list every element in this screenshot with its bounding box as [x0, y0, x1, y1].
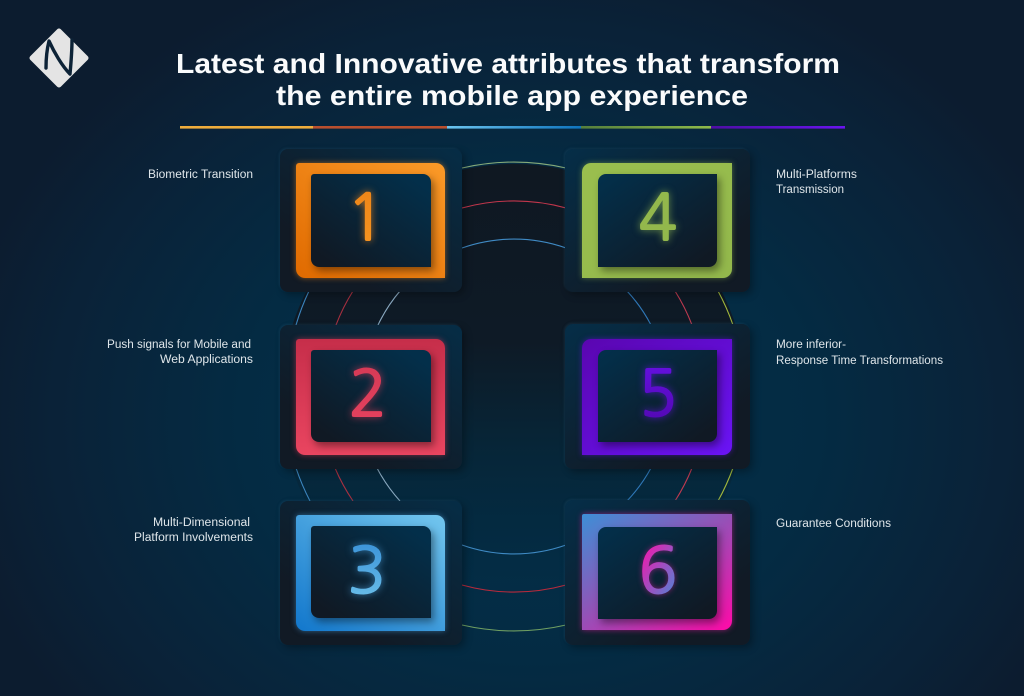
title multicolour underline: [180, 126, 845, 129]
ring background: [281, 164, 747, 630]
number 6: 6: [639, 540, 677, 603]
label: guarantee conditions: Guarantee Conditions: [776, 518, 891, 530]
label: multi-platforms: [776, 169, 857, 196]
number 1: 1: [347, 187, 385, 250]
label: push signals: Push signals for Mobile and: [107, 339, 251, 351]
number 3: 3: [348, 540, 386, 603]
card 2: [280, 325, 462, 469]
label: multi-dimensional: Platform Involvements: [134, 532, 253, 544]
title: Latest and Innovative attributes that transform: [176, 48, 840, 79]
connecting ring arcs: [296, 162, 733, 631]
label: push signals: [107, 339, 253, 366]
card 6: [565, 500, 750, 645]
number 4: 4: [639, 187, 677, 250]
number 2: 2: [349, 363, 387, 426]
label: response time: More inferior-: [776, 339, 846, 351]
label: multi-dimensional: Multi-Dimensional: [153, 517, 250, 529]
title: the entire mobile app experience: [276, 80, 748, 111]
card 1: [280, 149, 462, 292]
title: [176, 48, 840, 111]
label: multi-platforms: Transmission: [776, 184, 844, 196]
label: push signals: Web Applications: [160, 354, 253, 366]
label: biometric transition: Biometric Transition: [148, 169, 253, 181]
card 3: [280, 501, 462, 645]
card 4: [565, 149, 750, 292]
logo: [32, 31, 86, 85]
card 5: [565, 324, 750, 469]
label: response time: [776, 339, 943, 367]
label: multi-dimensional: [134, 517, 253, 544]
label: multi-platforms: Multi-Platforms: [776, 169, 857, 181]
label: response time: Response Time Transformations: [776, 355, 943, 367]
number 5: 5: [639, 363, 677, 426]
